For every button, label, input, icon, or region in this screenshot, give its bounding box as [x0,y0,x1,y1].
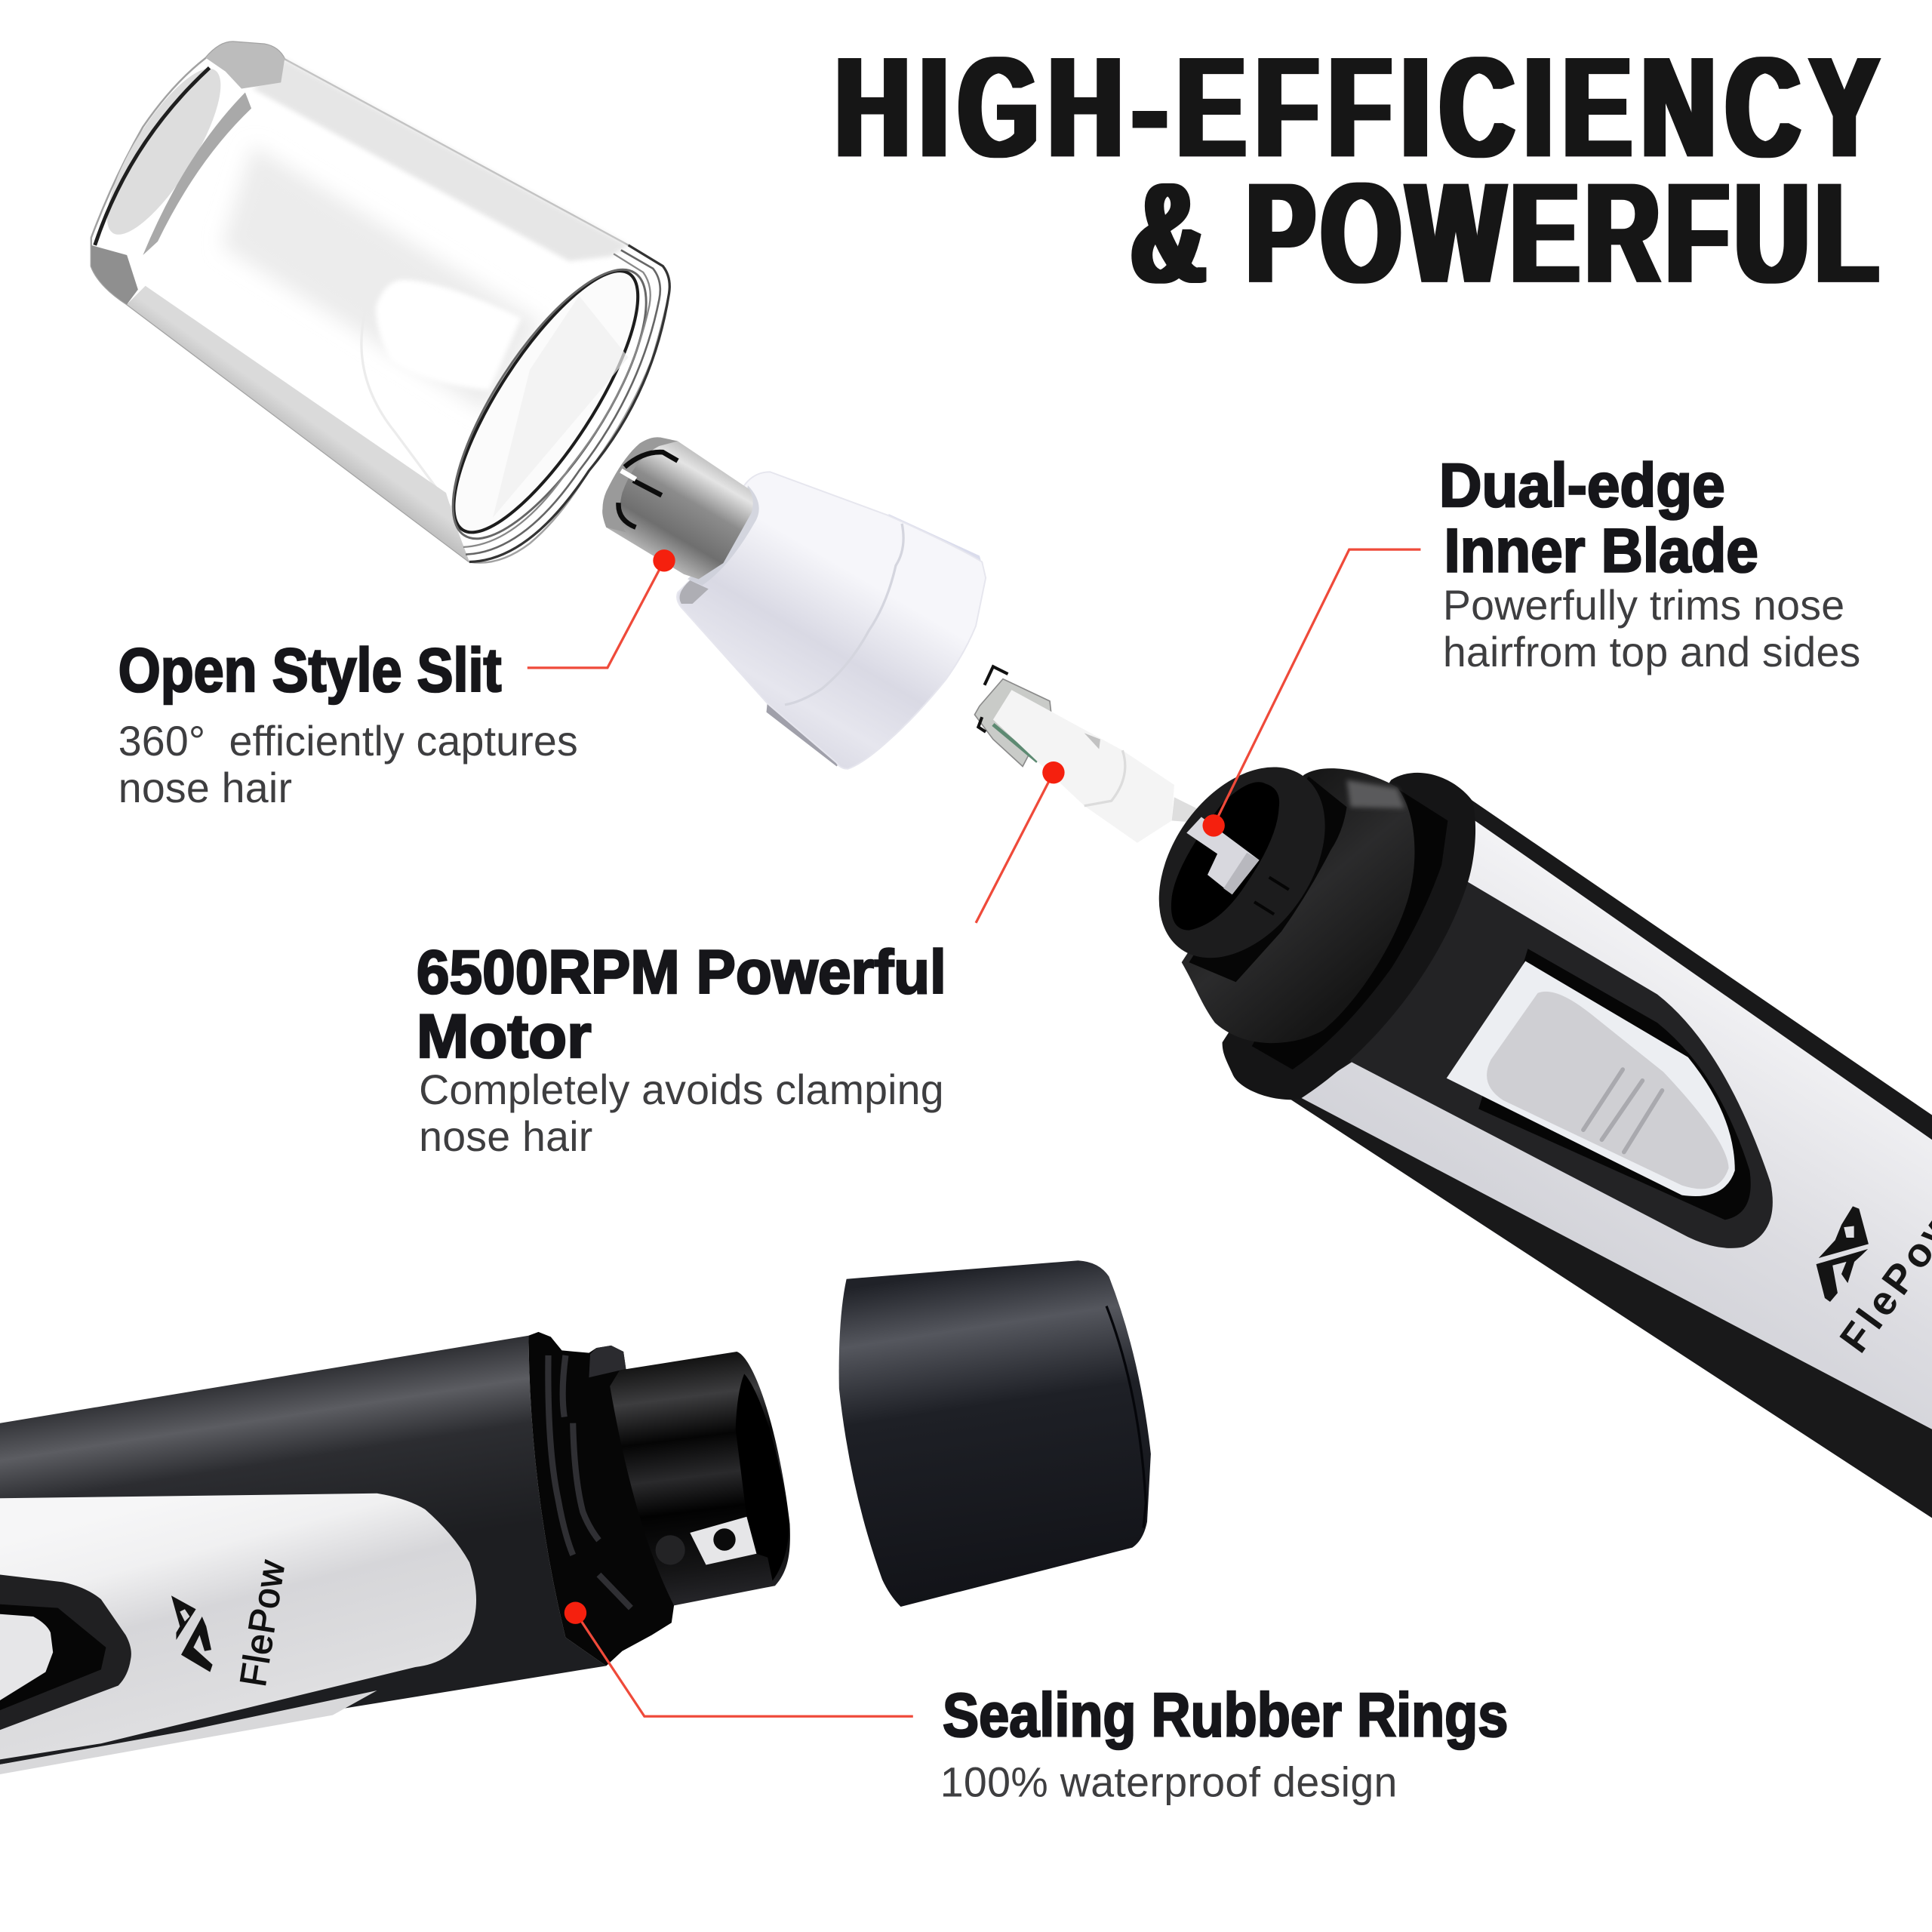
marker dot [565,1601,586,1624]
marker dot [653,549,675,572]
middle collar ring [1182,768,1414,1043]
callout: 6500RPM motor: Motor [417,1002,592,1071]
leader line [528,561,664,668]
motor and inner blade [974,666,1201,843]
leader line [577,1614,913,1716]
callout: open style slit: Open Style Slit [118,636,501,705]
leader line [1214,549,1420,826]
trimmer head [602,437,986,769]
left trimmer neck [610,1352,790,1605]
contact terminal [656,1517,756,1564]
silver panel [0,1494,476,1759]
open rim and threads [419,243,680,565]
title: HIGH-EFFICIENCY [835,27,1878,187]
slide switch [0,1614,53,1700]
left trimmer body [0,1332,674,1774]
callout: open style slit: nose hair [118,764,292,811]
callout: dual-edge inner blade [1202,451,1860,837]
slide switch [1447,961,1735,1196]
callout: 6500RPM motor: 6500RPM Powerful [417,938,946,1007]
callout: open style slit: 360° efficiently captures [118,718,578,764]
black switch surround [0,1575,131,1730]
callout: dual-edge inner blade: Powerfully trims nose [1443,582,1844,629]
sealing rings and collar [528,1332,674,1666]
inner socket ring and blade [1124,736,1359,989]
title [835,27,1878,312]
lower wall band [127,286,469,561]
callout: dual-edge inner blade: Inner Blade [1444,517,1758,586]
third collar ring [1223,773,1475,1100]
glass guard cap [88,42,680,565]
callout: 6500RPM motor: Completely avoids clamping [419,1066,944,1113]
leader line [976,773,1054,923]
marker dot [1202,814,1225,837]
upper wall band [253,59,629,261]
brand logo [171,1557,293,1689]
callout: sealing rubber rings: Sealing Rubber Rings [943,1681,1508,1749]
right trimmer body [1124,736,1932,1518]
title: & POWERFUL [1131,153,1878,312]
callout: dual-edge inner blade: hairfrom top and sides [1443,629,1860,675]
callout: open style slit [118,549,675,811]
black switch surround [1232,881,1773,1248]
callout: 6500RPM motor [417,761,1065,1160]
silver panel [1299,820,1932,1429]
white cone housing [677,472,986,769]
brand logo: FlePow [233,1557,293,1689]
callout: dual-edge inner blade: Dual-edge [1439,451,1725,520]
closed end [88,42,285,304]
metal blade guard [602,437,759,586]
black protective cap [839,1260,1151,1607]
marker dot [1042,761,1065,783]
callout: sealing rubber rings: 100% waterproof design [940,1758,1397,1805]
callout: sealing rubber rings [565,1601,1508,1805]
callout: 6500RPM motor: nose hair [419,1113,592,1160]
lower reflection [0,1690,377,1774]
